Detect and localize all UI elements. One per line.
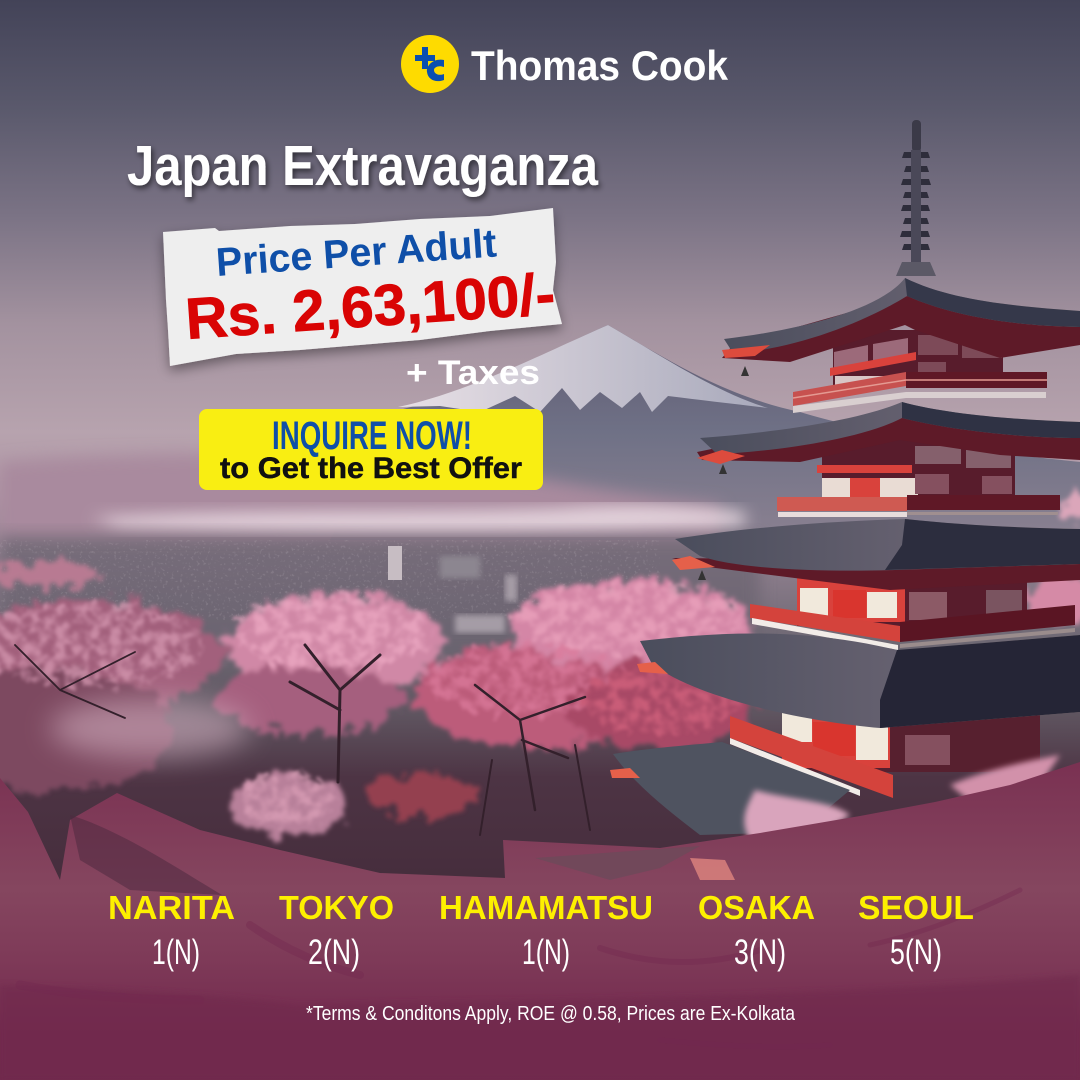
itinerary: cities and nights	[108, 889, 974, 972]
blossom at pagoda base	[744, 755, 1060, 855]
cloud band	[90, 505, 745, 534]
price tag paper	[163, 208, 562, 366]
taxes note: + Taxes	[406, 354, 540, 392]
call to action button	[199, 409, 543, 490]
Hamamatsu: HAMAMATSU	[439, 889, 653, 926]
Hamamatsu	[439, 889, 653, 972]
Seoul: 5(N)	[890, 933, 942, 972]
top roof	[722, 278, 1080, 376]
fifth roof	[610, 742, 850, 835]
Hamamatsu: 1(N)	[522, 933, 570, 972]
fourth tier body	[782, 708, 1040, 772]
cherry blossom trees	[0, 494, 1080, 837]
city in the valley	[0, 535, 760, 655]
Seoul	[858, 889, 974, 972]
Narita	[108, 889, 235, 972]
second balcony	[777, 495, 1060, 517]
tree trunks and branches	[15, 645, 590, 835]
pagoda spire	[896, 120, 936, 276]
fourth roof	[637, 633, 1080, 728]
terms and conditions: *Terms & Conditons Apply, ROE @ 0.58, Prices are Ex-Kolkata	[306, 1003, 796, 1025]
third balcony	[750, 604, 1075, 650]
title: Japan Extravaganza	[127, 134, 599, 198]
Seoul: SEOUL	[858, 889, 974, 926]
third tier body	[797, 572, 1027, 626]
Osaka: 3(N)	[734, 933, 786, 972]
mountain: Mount Fuji	[0, 325, 1080, 540]
button subline: to Get the Best Offer	[220, 452, 522, 485]
top tier body	[830, 330, 1003, 386]
Tokyo	[279, 889, 394, 972]
Tokyo: 2(N)	[308, 933, 360, 972]
pagoda	[610, 120, 1080, 855]
Narita: 1(N)	[152, 933, 200, 972]
logo: Thomas Cook	[401, 35, 729, 93]
tree canopies	[0, 494, 1080, 837]
Osaka	[698, 889, 815, 972]
Osaka: OSAKA	[698, 889, 815, 926]
Narita: NARITA	[108, 889, 235, 926]
second roof	[697, 402, 1080, 474]
second tier body	[817, 440, 1015, 500]
maroon brush band	[0, 762, 1080, 1080]
button headline: INQUIRE NOW!	[272, 414, 472, 458]
logo wordmark: Thomas Cook	[471, 42, 729, 89]
tree highlights	[0, 582, 745, 826]
fourth balcony	[730, 716, 893, 798]
top balcony	[793, 372, 1047, 413]
third roof	[672, 519, 1080, 590]
logo icon	[401, 35, 459, 93]
price amount: Rs. 2,63,100/-	[183, 261, 557, 352]
price label: Price Per Adult	[215, 221, 498, 285]
Tokyo: TOKYO	[279, 889, 394, 926]
